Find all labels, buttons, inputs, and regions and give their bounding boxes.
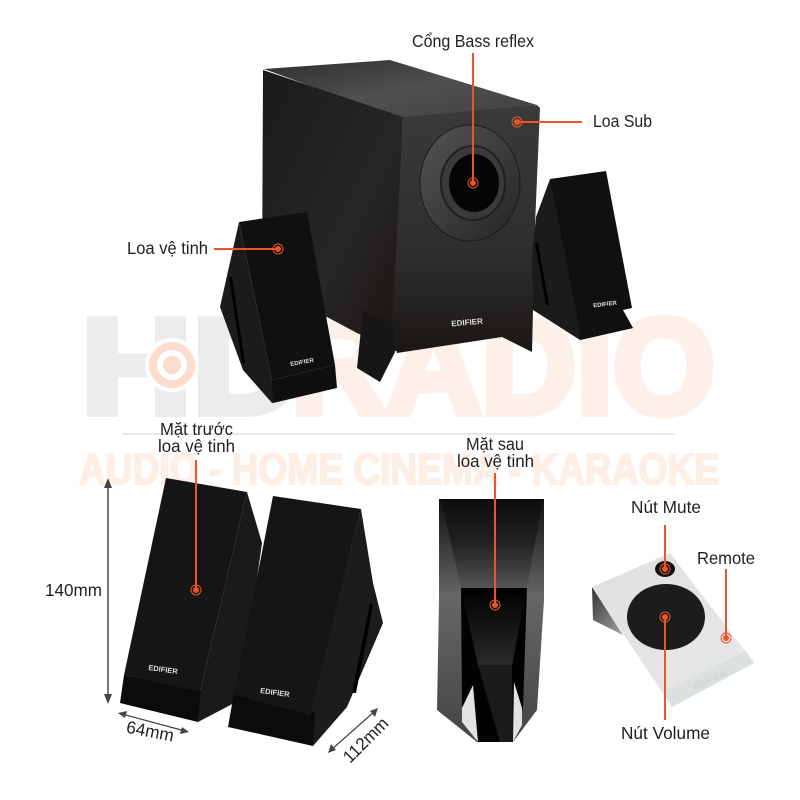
port inner ring <box>441 146 505 220</box>
front right logo: EDIFIER <box>260 686 291 699</box>
subwoofer front face <box>392 105 540 353</box>
label: Mặt sau loa vệ tinh <box>457 434 534 471</box>
label: Mặt trước loa vệ tinh: Mặt trước <box>160 419 233 439</box>
leader: mute button <box>660 525 670 574</box>
watermark target circle <box>145 338 199 392</box>
subwoofer left face <box>262 70 403 352</box>
dimension arrow: height <box>104 478 112 704</box>
leader: bass reflex port <box>468 53 478 188</box>
watermark word RADIO: RADIO <box>291 291 715 442</box>
front left logo: EDIFIER <box>148 663 179 676</box>
leader: volume knob <box>660 612 670 720</box>
rear view speaker <box>437 499 544 742</box>
left satellite side <box>220 222 300 403</box>
label: Remote: Remote <box>697 548 755 568</box>
mute button <box>655 561 675 577</box>
label: Nút Mute: Nút Mute <box>631 497 701 517</box>
right satellite base <box>578 309 633 340</box>
volume knob <box>627 584 705 650</box>
label: Nút Volume: Nút Volume <box>621 723 710 743</box>
rear upper trapezoid <box>441 499 543 588</box>
leader: remote <box>721 569 731 643</box>
right satellite side <box>532 179 633 340</box>
port outer ring <box>420 125 520 241</box>
left satellite panel <box>239 212 335 380</box>
rear central panel <box>461 588 527 665</box>
subwoofer top face <box>264 60 537 120</box>
front left speaker panel <box>124 478 247 692</box>
remote control <box>592 553 754 707</box>
dimension arrow: width <box>118 711 189 734</box>
left satellite speaker <box>220 212 337 403</box>
rear left white sliver <box>462 685 478 742</box>
remote top plate <box>592 553 754 707</box>
front view speakers <box>120 478 383 746</box>
front right speaker panel <box>234 496 361 715</box>
front left speaker base <box>120 675 201 722</box>
label: Mặt trước loa vệ tinh <box>158 419 235 456</box>
label: 140mm: 140mm <box>45 580 102 600</box>
right satellite speaker <box>532 171 633 340</box>
rear black panel <box>461 588 527 742</box>
label: 112mm: 112mm <box>339 713 392 767</box>
left satellite base <box>272 365 337 403</box>
remote logo: EDIFIER <box>692 668 729 692</box>
label: Loa Sub: Loa Sub <box>593 111 652 131</box>
leader: satellite front <box>191 460 201 595</box>
stand wedge <box>357 310 395 382</box>
port hole <box>449 154 499 212</box>
label: Cổng Bass reflex: Cổng Bass reflex <box>412 31 534 51</box>
leader: subwoofer <box>512 117 582 127</box>
leader: satellite rear <box>490 473 500 610</box>
watermark word HD: HD <box>81 291 303 442</box>
label: Loa vệ tinh: Loa vệ tinh <box>127 238 208 258</box>
front right speaker base <box>228 693 315 746</box>
left satellite logo: EDIFIER <box>290 358 315 368</box>
leader: satellite speaker <box>214 244 283 254</box>
right satellite panel <box>550 171 632 320</box>
front left speaker side <box>198 492 262 722</box>
front right speaker side <box>310 509 383 746</box>
front right speaker slot <box>352 603 373 693</box>
right satellite logo: EDIFIER <box>593 300 618 309</box>
remote wedge side <box>592 587 623 635</box>
dimension arrow: depth <box>328 708 378 753</box>
rear speaker body <box>437 499 544 742</box>
watermark: HD Radio logo <box>81 291 715 442</box>
label: Mặt trước loa vệ tinh: loa vệ tinh <box>158 436 235 456</box>
rear lower panel <box>478 665 513 742</box>
left satellite slot <box>229 277 245 363</box>
subwoofer logo: EDIFIER <box>451 317 483 328</box>
rear right white sliver <box>513 682 522 742</box>
remote logo strip <box>664 651 754 707</box>
right satellite slot <box>535 243 549 305</box>
label: Mặt sau loa vệ tinh: Mặt sau <box>466 434 524 454</box>
label: Mặt sau loa vệ tinh: loa vệ tinh <box>457 451 534 471</box>
label: 64mm: 64mm <box>125 717 176 746</box>
subwoofer <box>262 60 540 382</box>
